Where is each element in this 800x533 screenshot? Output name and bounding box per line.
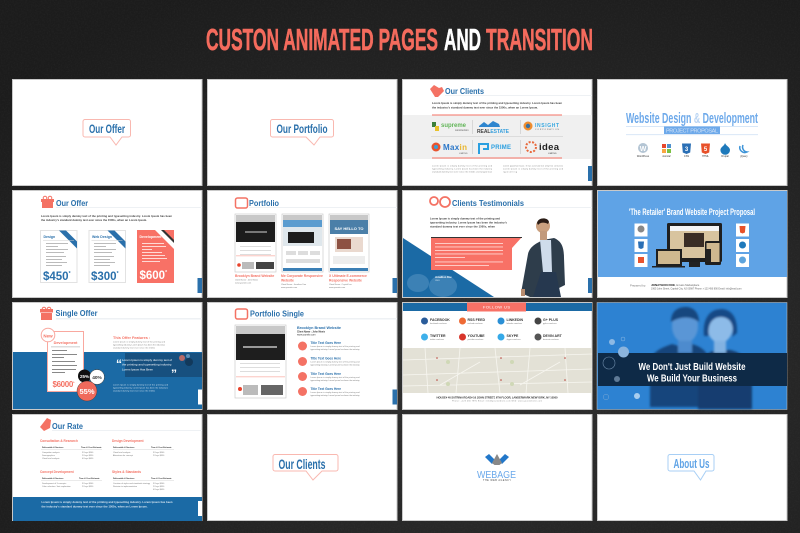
rate table: Styles: 4 Days $450 (153, 489, 165, 491)
feature 2: Title Text Goes Here (310, 356, 341, 360)
rate table: Consultation: Deliverable & Services (42, 447, 64, 449)
footer text: Lorem Ipsum is simply dummy text of the printing and (113, 384, 168, 386)
feature 3: typesetting industry. Lorem Ipsum has been the industry (310, 379, 360, 382)
logo: idea: idea (539, 142, 560, 153)
rate table: Design: 2 Days $350 (153, 455, 165, 457)
pricing card: Design (40, 230, 77, 283)
speech bubble: Our Portfolio: Our Portfolio (276, 122, 328, 136)
captions: www.yoursite.com (281, 286, 297, 289)
panel: Our Clients slide (402, 80, 592, 186)
pricing card: Development: $600 (140, 270, 165, 282)
rate table: Styles (112, 470, 174, 491)
side tab (588, 278, 592, 293)
features text: standard dummy text ever since the 1500s (113, 346, 155, 350)
website thumbnail 3: SAY HELLO TO (334, 226, 364, 231)
address: Phone: +123 456 7890 Email: info@yourwebsite.com Web: www.yourwebsite.com (452, 400, 542, 402)
technology icons (637, 143, 748, 158)
rate table: Consultation: Competitor analysis (42, 451, 60, 454)
prepared by footer (630, 283, 742, 290)
footer text: the industry's standard dummy text ever since the 1500s, when an Lorem Ipsum. (42, 504, 148, 508)
social: LinkedIn (498, 318, 524, 325)
logo: idea (526, 142, 560, 155)
side tab (392, 278, 397, 293)
social: LinkedIn: linkedin.com/user (506, 323, 522, 325)
decorative circles (179, 354, 193, 366)
icon: CSS (682, 144, 691, 158)
captions: Brooklyn Brand Website (235, 274, 274, 278)
footer text: Lorem Ipsum is simply dummy text of the printing and (432, 164, 492, 168)
logo: real estate (477, 121, 510, 135)
rate table: Concept: 2 Days $350 (82, 486, 94, 488)
follow us tab (467, 302, 526, 312)
logo: prime: PRIME (491, 145, 511, 151)
icon: WordPress (637, 143, 650, 158)
features text: Lorem Ipsum is simply dummy text of the printing and (113, 340, 165, 344)
rate table: Consultation: 4 Days $450 (82, 458, 94, 460)
feature 2: typesetting industry. Lorem Ipsum has been the industry (310, 364, 360, 366)
feature 2: Lorem Ipsum is simply dummy text of the printing and (310, 360, 360, 364)
title: AND (444, 22, 481, 57)
footer text: standard dummy text ever since the 1500s (113, 390, 155, 392)
heading: Our Offer (56, 199, 88, 208)
rate table: Concept: Concept Development (40, 470, 75, 474)
feature 1: Lorem Ipsum is simply dummy text of the printing and (310, 345, 360, 348)
intro text: Lorem Ipsum is simply dummy text of the printing and typesetting industry. Lorem Ipsum has been (432, 101, 562, 105)
icon: speech bubbles (430, 197, 450, 207)
footer text (113, 384, 168, 392)
rate table: Styles: Creation of styles and standards strategy (113, 482, 150, 485)
footer text: typesetting industry. Lorem Ipsum has been the industry (432, 168, 492, 170)
address (436, 396, 558, 402)
features text: typesetting industry. Lorem Ipsum has been the industry's (113, 344, 165, 346)
author text (435, 276, 452, 282)
intro text (41, 214, 172, 222)
feature 1: typesetting industry. Lorem Ipsum has been the industry (310, 348, 360, 351)
logo: supreme: construction (455, 129, 469, 132)
pricing card: Design: * (69, 271, 71, 277)
footer text (42, 500, 173, 508)
rate table: Concept: Deliverable & Services (42, 478, 64, 480)
side tab (198, 390, 202, 404)
feature 3 (298, 372, 360, 382)
heading: Portfolio (249, 199, 279, 208)
icon: CSS: 3 (685, 147, 689, 153)
social: Facebook (421, 318, 450, 325)
icon: gift (40, 307, 53, 320)
panel: Follow Us slide (402, 302, 592, 410)
icon: HTML (701, 144, 710, 158)
captions: Website (281, 278, 294, 282)
heading: Our Rate (52, 422, 83, 431)
speech bubble: Our Offer: Our Offer (89, 122, 125, 136)
intro text: standard dummy text ever since the 1500s, when (430, 224, 495, 228)
slogan: We Build Your Business (647, 372, 737, 384)
speech bubble: Our Portfolio (270, 120, 334, 145)
pricing card: Design: $450 (43, 271, 69, 283)
logo: Webage (477, 454, 516, 482)
rate table: Concept: Development of 3 concepts (42, 482, 66, 485)
panel: Our Portfolio divider (208, 80, 397, 186)
feature 4: Title Text Goes Here (310, 387, 341, 391)
intro text: the industry's standard dummy text ever since the 1500s, when an Lorem Ipsum. (432, 106, 538, 110)
side tab (198, 501, 202, 516)
panel: Clients Testimonials slide (402, 190, 592, 298)
decorative bubbles (603, 337, 640, 400)
captions: Me Corporate Responsive (281, 274, 323, 278)
social: YouTube: YOUTUBE (468, 334, 485, 338)
offer card: $6000 (52, 380, 73, 389)
rate table: Styles: Time & Cost Estimate (151, 477, 172, 480)
side tab (392, 390, 397, 404)
rate table: Styles: Styles & Standards (112, 470, 141, 474)
icon: portfolio case (236, 309, 248, 319)
social: G+ Plus: gplus.com/user (543, 323, 557, 325)
author text: CEO (435, 280, 440, 282)
intro text: typesetting industry. Lorem Ipsum has been the industry's (430, 220, 508, 224)
icon: jQuery: jQuery (739, 155, 748, 158)
prepared by footer: 1965 John Street, Capital City, NJ 00987 Phone: +123 456 890 Email: info@mail.com (651, 288, 742, 290)
social: Skype: skype.com/user (506, 339, 521, 341)
client logo band (403, 114, 592, 159)
quote: ” (171, 367, 177, 381)
new badge: New (43, 334, 53, 338)
rate table: Consultation: Client brief analysis (42, 457, 59, 460)
icon: CSS: CSS (684, 155, 689, 158)
social: G+ Plus (534, 318, 559, 325)
percentage circles: 25% (80, 374, 89, 379)
logo: insight: CORPORATION (535, 128, 560, 131)
social: YouTube: youtube.com/user (468, 338, 484, 341)
intro text (430, 216, 508, 228)
features text (113, 336, 165, 350)
footer text: Lorem pipsimon base. It has survived not only five centuries (503, 164, 563, 168)
rate table: Consultation: Time & Cost Estimate (81, 446, 102, 449)
feature 3: Title Text Goes Here (310, 372, 341, 376)
quote callout (431, 237, 522, 270)
logo: Webage: WEBAGE (477, 469, 516, 481)
panel: The Retailer proposal slide (598, 190, 787, 298)
pricing card: Design: Design (44, 235, 55, 239)
rate table: Consultation: 2 Days $350 (82, 455, 94, 457)
technology tiles right (736, 224, 749, 267)
panel: Webage logo slide (402, 414, 592, 520)
panel: Our Rate slide (12, 414, 202, 521)
social: RSS Feed (459, 318, 485, 325)
captions: Client Name : Jonathon Doe (281, 283, 307, 286)
follow us tab: FOLLOW US (483, 304, 510, 310)
feature 2 (298, 356, 360, 366)
dark text band (598, 353, 787, 386)
logo: insight (524, 122, 560, 131)
footer text: typesetting (503, 170, 517, 174)
title: TRANSITION (486, 22, 593, 57)
social: LinkedIn: LINKEDIN (506, 318, 524, 322)
feature 1: Title Text Goes Here (310, 341, 341, 345)
author text: Jonathon Doe (435, 276, 452, 279)
footer text: typesetting industry. Lorem Ipsum has been the industry's (113, 386, 168, 390)
rate table: Design: Client brief analysis (113, 451, 130, 454)
slogan: We Don't Just Build Website (638, 361, 746, 373)
rate table: Design (112, 439, 174, 457)
captions (235, 274, 367, 289)
heading: Single Offer (56, 309, 98, 318)
rate table: Design: Deliverable & Services (113, 447, 135, 449)
pricing card: Web Design: $300 (91, 271, 117, 283)
responsive device mockups (652, 223, 722, 268)
slogan (638, 361, 746, 384)
social links (421, 318, 563, 341)
offer card: Development (54, 341, 78, 345)
captions: www.yoursite.com (329, 286, 345, 289)
logo: prime (479, 144, 511, 154)
icon: gift (41, 196, 54, 208)
pricing card: Web Design: * (117, 271, 119, 277)
rate table: Design: Alterations for concept (113, 454, 133, 457)
percentage circles (77, 370, 104, 401)
logo: maxin: Maxin (443, 143, 467, 152)
speech bubble: Our Clients: Our Clients (278, 456, 326, 472)
website screenshot (235, 325, 286, 398)
panel: Single Offer slide (12, 302, 202, 410)
social: Devin Art: devinart.com/user (543, 338, 559, 341)
faded bubble icon (407, 274, 457, 297)
footer text: standard dummy text ever since the 1500s unchanged now (432, 170, 493, 174)
footer text: Lorem Ipsum is simply dummy text of the printing and typesetting industry. Lorem Ipsum has been (42, 500, 173, 504)
title: CUSTON ANIMATED PAGES (206, 22, 438, 57)
rate table: Concept: Time & Cost Estimate (79, 477, 100, 480)
quote: Lorem Ipsum is simply dummy text of (122, 358, 172, 362)
speech bubble: About Us (668, 454, 714, 480)
captions: Client Name : Crystal Lee (329, 283, 353, 286)
pricing card: Web Design (89, 230, 126, 283)
new badge (41, 328, 55, 342)
quote: the printing and typesetting industry. (122, 362, 172, 366)
social: Twitter: TWITTER (430, 334, 446, 338)
prepared by footer: Prepared by: (630, 284, 646, 288)
project title: Client Name : John Monis (297, 330, 326, 334)
intro text (432, 101, 562, 110)
social: Twitter (421, 334, 446, 341)
social: Facebook: FACEBOOK (430, 318, 450, 322)
panel: About Us divider (598, 414, 787, 520)
business people photo (650, 307, 752, 409)
offer card: * (73, 380, 75, 385)
feature 1 (298, 341, 360, 351)
percentage circles: 40% (92, 375, 103, 381)
panel: Our Clients divider (208, 414, 397, 520)
intro text: Lorem Ipsum is simply dummy text of the printing and typesetting industry. Lorem Ipsum has been (41, 214, 172, 218)
side tab (588, 166, 592, 181)
heading: Website Design & Development (626, 110, 758, 127)
speech bubble: About Us: About Us (674, 456, 710, 471)
pricing card: Development: Development (140, 235, 162, 239)
technology tiles left (634, 224, 648, 267)
rate table: Concept (40, 470, 102, 488)
logo: supreme (432, 122, 469, 132)
captions: Client Name : John Monis (235, 278, 258, 282)
rate table: Design: 3 Days $500 (153, 452, 165, 454)
project title (297, 326, 341, 336)
icon: handshake (430, 85, 444, 97)
quote: Lorem Ipsum Has Been (122, 368, 153, 372)
side tab (198, 278, 202, 293)
icon: WordPress: W (640, 146, 647, 153)
rate table: Styles: 3 Days $500 (153, 483, 165, 485)
icon: price tag (40, 418, 51, 431)
logo: insight: INSIGHT (535, 123, 559, 129)
rate table: Consultation (40, 439, 102, 460)
website thumbnail 3 (329, 214, 369, 272)
social: Facebook: facebook.com/user (430, 323, 447, 325)
social: RSS Feed: rssfeed.com/user (468, 323, 483, 325)
heading: Portfolio Single (250, 310, 305, 318)
panel: Our Offer divider (12, 80, 202, 186)
feature 4: typesetting industry. Lorem Ipsum has been the industry (310, 394, 360, 397)
project title: www.yoursite.com (297, 334, 316, 336)
pricing card: Development (137, 230, 174, 283)
subtitle badge (664, 126, 720, 134)
rate table: Styles: Deliverable & Services (113, 478, 135, 480)
rate table: Styles: Revision to implementation (113, 485, 137, 488)
feature list (298, 341, 360, 397)
logo: maxin: LIMITED (459, 153, 468, 155)
social: Devin Art (534, 334, 563, 341)
intro text: Lorem Ipsum is simply dummy text of the printing and (430, 216, 500, 220)
social: G+ Plus: G+ PLUS (543, 318, 559, 322)
captions: X Ultimate E-commerce (329, 274, 367, 278)
logo: real estate: REALESTATE (477, 129, 510, 135)
captions: Responsive Website (329, 278, 362, 282)
prepared by footer: JONATHON DOE, Envato Marketplace (651, 283, 700, 287)
rate table: Styles: 2 Days $350 (153, 486, 165, 488)
panel: Our Offer pricing slide (12, 190, 202, 298)
social: YouTube (459, 334, 485, 341)
map (403, 348, 592, 393)
feature 4 (298, 387, 360, 397)
quote: “ (116, 357, 122, 371)
website thumbnail 2 (282, 214, 323, 272)
quote (116, 357, 177, 381)
heading: Our Clients (445, 87, 484, 96)
rate table: Consultation: Consultation & Research (40, 439, 78, 443)
logo: Webage: THE WEB AGENCY (483, 479, 511, 482)
social: Devin Art: DEVIN ART (543, 334, 563, 338)
panel: Portfolio Single slide (208, 302, 397, 410)
rate table: Consultation: Demographics (42, 455, 55, 457)
social: Twitter: twitter.com/user (430, 338, 444, 341)
heading: Clients Testimonials (452, 199, 525, 208)
panel: Portfolio slide (208, 190, 397, 298)
percentage circles: 55% (79, 387, 95, 396)
person in suit (521, 218, 565, 297)
address: HOUSE# 40 SUTRINA ROAD# 16 JOHN STREET, 6TH FLOOR, LANDERMARK NEWYORK, NY 10500 (436, 396, 558, 400)
icon: portfolio case (236, 198, 248, 208)
rate table: Consultation: 3 Days $500 (82, 452, 94, 454)
panel: We Build Your Business slide (597, 302, 787, 410)
feature 3: Lorem Ipsum is simply dummy text of the printing and (310, 376, 360, 379)
icon: WordPress: WordPress (637, 155, 650, 158)
subtitle badge: PROJECT PROPOSAL (666, 128, 718, 134)
icon: Drupal: Drupal (721, 155, 729, 158)
captions: www.yoursite.com (235, 282, 251, 284)
blue diagonal background (403, 238, 494, 297)
panel: Website Design title slide (598, 80, 787, 186)
intro text: the industry's standard dummy text ever since the 1500s, when an Lorem Ipsum. (41, 218, 147, 222)
social: Skype: SKYPE (506, 334, 519, 338)
logo: maxin (432, 142, 468, 155)
rate table: Concept: Color selection / font exploration (42, 485, 71, 488)
rate table: Design: Time & Cost Estimate (151, 446, 172, 449)
website thumbnail 1 (235, 214, 276, 272)
feature 4: Lorem Ipsum is simply dummy text of the printing and (310, 391, 360, 394)
project title: Brooklyn Brand Website (297, 326, 341, 330)
icon: Joomla: Joomla! (662, 155, 671, 158)
logo: supreme: supreme (441, 123, 467, 129)
social: Skype (498, 334, 521, 341)
footer text (432, 164, 563, 174)
rate table: Design: Design Development (112, 439, 144, 443)
offer card (48, 332, 84, 392)
speech bubble: Our Offer (83, 120, 130, 145)
icon: HTML: 5 (704, 147, 708, 153)
pricing card: Web Design: Web Design (92, 235, 112, 239)
icon: HTML: HTML (702, 155, 710, 158)
social: RSS Feed: RSS FEED (468, 318, 485, 322)
logo: idea: LIMITED (548, 153, 557, 155)
speech bubble: Our Clients (273, 454, 338, 480)
pricing card: Development: * (165, 270, 167, 276)
rate table: Concept: 3 Days $500 (82, 483, 94, 485)
footer text: Lorem Ipsum is simply dummy text of the printing and (503, 168, 563, 170)
features text: This Offer Features : (113, 336, 150, 340)
